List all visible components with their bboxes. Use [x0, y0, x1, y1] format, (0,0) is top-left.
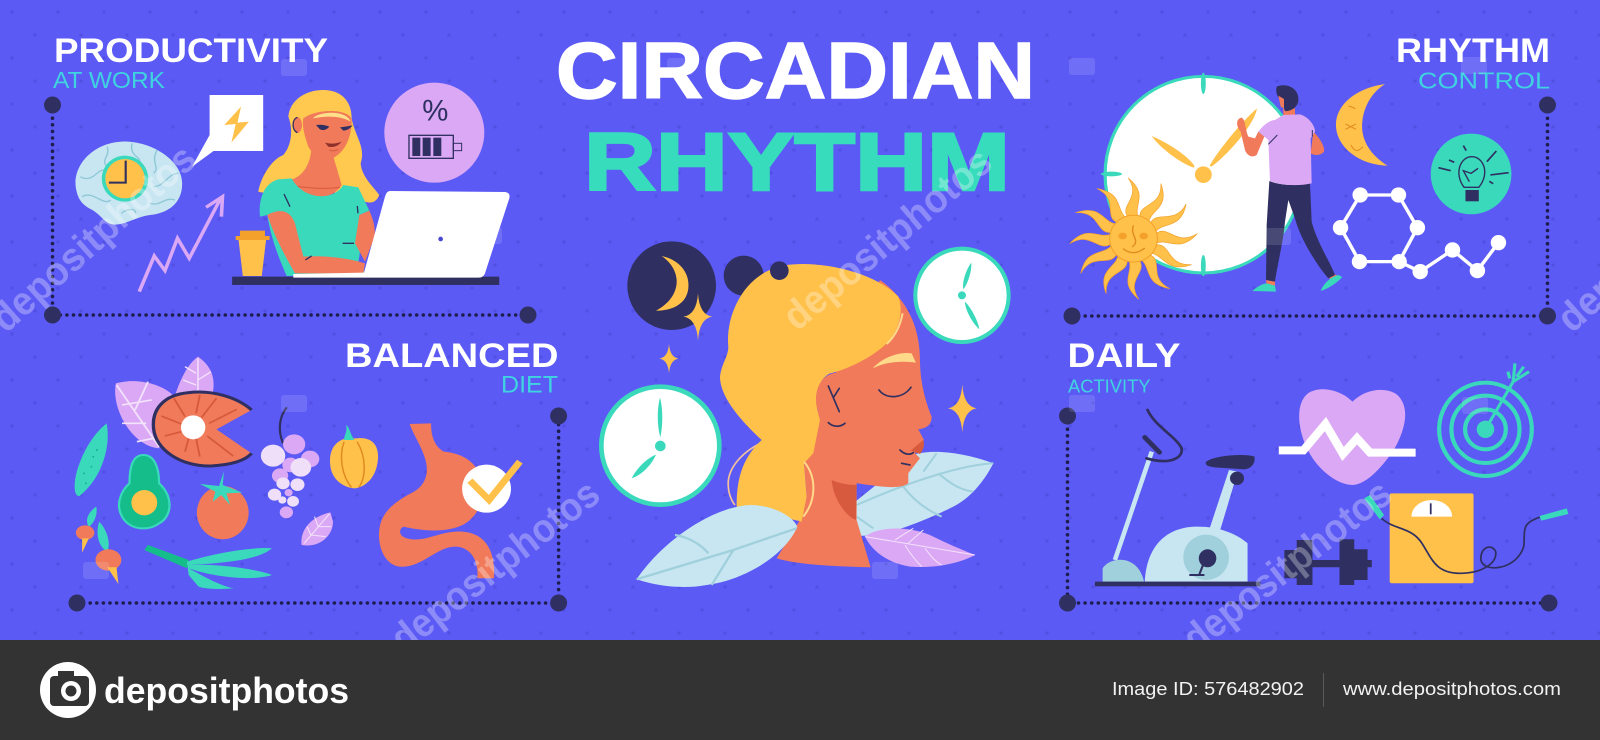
- icon: grapes: [261, 407, 319, 518]
- icon: light bulb: [1431, 134, 1511, 214]
- icon: right clock: [915, 249, 1009, 342]
- watermark text centre: depositphotos: [775, 139, 1000, 339]
- icon: moon in night circle: [627, 241, 716, 330]
- title line: rhythm: RHYTHM: [584, 117, 1010, 208]
- panel: balanced diet: [68, 337, 567, 612]
- icon: jump rope: [1364, 495, 1568, 573]
- icon: left blue leaf: [637, 505, 797, 587]
- logo: camera badge: [40, 662, 96, 718]
- subheading: activity: ACTIVITY: [1068, 376, 1150, 396]
- icon: sparkles: [659, 293, 977, 432]
- figure: woman at laptop: [258, 83, 510, 278]
- illustration: productivity left icons: [75, 95, 499, 292]
- panel frame: dotted corner: [1059, 408, 1558, 612]
- icon: leek: [144, 545, 272, 589]
- icon: tomato: [197, 472, 249, 539]
- icon: target with arrow: [1439, 363, 1532, 476]
- panel: rhythm control: [1064, 32, 1556, 324]
- icon: speech bubble with lightning: [192, 95, 263, 167]
- figure: head profile: [720, 264, 932, 567]
- icon: sun: [1070, 178, 1197, 299]
- icon: stomach: [379, 423, 494, 578]
- heading: productivity: PRODUCTIVITY: [54, 32, 328, 70]
- icon: yellow pepper: [330, 425, 378, 488]
- panel: daily activity: [1059, 337, 1568, 612]
- icon: battery percent: [384, 83, 484, 183]
- icon: battery percent: %: [422, 95, 448, 128]
- title: [556, 26, 1035, 208]
- icon: left clock: [601, 387, 719, 505]
- panel: productivity at work: [44, 32, 536, 324]
- icon: right blue leaf: [853, 452, 993, 536]
- icon: small leaf: [301, 512, 333, 546]
- illustration: rhythm control: [1070, 73, 1511, 299]
- icon: molecule: [1333, 187, 1506, 279]
- watermarks: [0, 136, 1600, 661]
- heading: daily: DAILY: [1068, 337, 1181, 375]
- icon: heart with pulse: [1279, 389, 1416, 485]
- panel frame: dotted corner: [1064, 96, 1556, 324]
- central illustration: sleeping head: [601, 241, 1009, 587]
- illustration: daily activity: [1095, 363, 1568, 586]
- image id: Image ID: 576482902: [1112, 679, 1304, 699]
- logo: wordmark: depositphotos: [104, 670, 349, 711]
- footer bar: [0, 640, 1600, 740]
- subheading: control: CONTROL: [1418, 68, 1550, 94]
- icon: small dark dot: [770, 261, 789, 280]
- icon: lilac leaves: [115, 357, 214, 448]
- heading: balanced: BALANCED: [345, 337, 558, 375]
- desk: [232, 277, 499, 285]
- icon: avocado: [119, 455, 170, 528]
- website: www.depositphotos.com: [1342, 679, 1561, 699]
- icon: coffee cup: [236, 231, 270, 276]
- icon: salmon steak: [153, 392, 252, 466]
- icon: brain with clock: [75, 142, 182, 225]
- icon: dumbbell: [1284, 539, 1372, 585]
- title line: circadian: CIRCADIAN: [556, 26, 1035, 115]
- icon: lilac leaf: [865, 528, 975, 567]
- icon: laptop: [293, 191, 510, 278]
- watermark text lower right: depositphotos: [1174, 471, 1400, 661]
- heading: rhythm: RHYTHM: [1396, 32, 1550, 70]
- icon: exercise bike: [1095, 410, 1261, 586]
- icon: crescent moon: [1336, 84, 1388, 166]
- icon: dark dot: [724, 256, 764, 296]
- subheading: at work: AT WORK: [53, 67, 166, 93]
- panel frame: dotted corner: [68, 408, 567, 612]
- panel frame: dotted corner: [44, 96, 536, 324]
- icon: check mark: [462, 462, 520, 513]
- figure: man moving clock hand: [1237, 85, 1342, 292]
- icon: cucumber: [75, 423, 108, 496]
- icon: bathroom scale: [1390, 493, 1474, 583]
- watermark text lower left: depositphotos: [382, 471, 608, 661]
- icon: radishes: [76, 507, 121, 584]
- icon: rising arrow: [139, 197, 222, 292]
- subheading: diet: DIET: [501, 372, 558, 398]
- icon: large wall clock: [1101, 73, 1302, 276]
- illustration: balanced diet: [75, 357, 520, 589]
